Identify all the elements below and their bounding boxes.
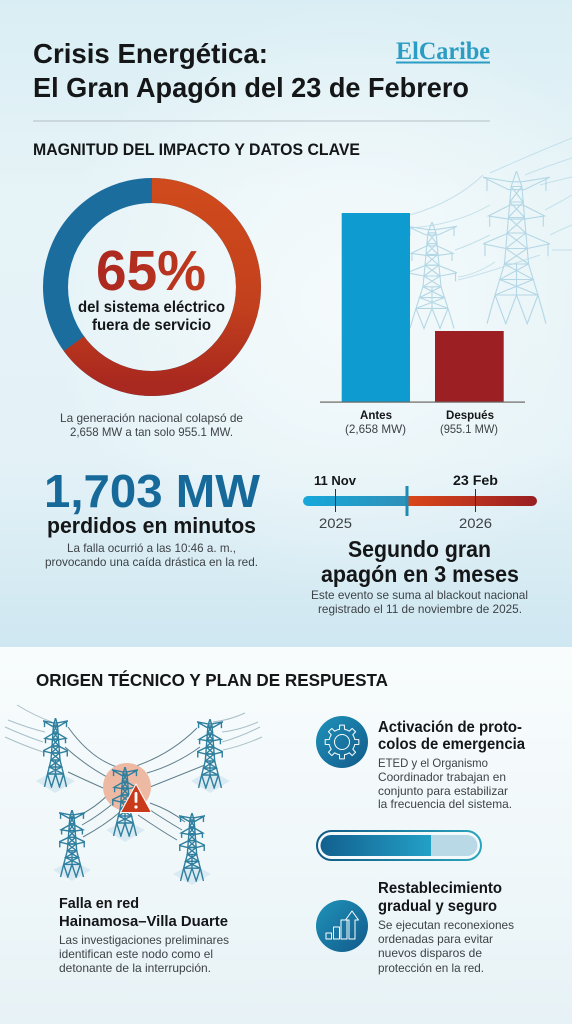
logo: El Caribe: ElCaribe: [396, 38, 490, 65]
text: restablecimiento: Restablecimiento: [378, 880, 502, 897]
text: restablecimiento: nuevos disparos de: [378, 946, 482, 960]
stat: 1,703 MW: La falla ocurrió a las 10:46 a. m.,: [67, 541, 236, 555]
tower: top right: [197, 719, 223, 788]
donut label: fuera de servicio: [92, 317, 211, 334]
bar: antes: [342, 213, 410, 402]
label: antes: (2,658 MW): [345, 422, 406, 436]
text: activación de protocolos: colos de emergencia: [378, 736, 525, 753]
tower: centre: [112, 767, 138, 836]
stat: 1,703 MW: provocando una caída drástica en la red.: [45, 555, 258, 569]
tower: bottom left: [59, 810, 85, 877]
stat: segundo gran apagón: registrado el 11 de noviembre de 2025.: [318, 602, 522, 616]
text: activación de protocolos: conjunto para estabilizar: [378, 784, 508, 798]
tower: top left: [43, 718, 68, 787]
icon: warning triangle: [120, 784, 152, 812]
heading: magnitud del impacto: MAGNITUD DEL IMPACTO Y DATOS CLAVE: [33, 140, 360, 159]
text: falla en red: detonante de la interrupción.: [59, 961, 211, 975]
icon: gear: [316, 716, 368, 768]
label: después: (955.1 MW): [440, 422, 498, 436]
label: antes: Antes: [360, 408, 392, 422]
stat: segundo gran apagón: Este evento se suma al blackout nacional: [311, 588, 528, 602]
donut caption: [60, 411, 243, 439]
tower: bottom right: [179, 813, 205, 881]
donut caption: La generación nacional colapsó de: [60, 411, 243, 425]
background: upper section: [0, 0, 572, 647]
text: activación de protocolos: Coordinador trabajan en: [378, 770, 506, 784]
text: falla en red: Falla en red: [59, 895, 139, 912]
text: activación de protocolos: [378, 719, 525, 811]
stat: 1,703 MW: [44, 465, 261, 569]
progress bar: [317, 831, 481, 860]
text: restablecimiento: ordenadas para evitar: [378, 932, 493, 946]
donut label: del sistema eléctrico: [78, 299, 225, 316]
bar: después: [435, 331, 504, 402]
bar chart: antes y después: [320, 213, 525, 436]
text: activación de protocolos: Activación de proto-: [378, 719, 522, 736]
text: restablecimiento: Se ejecutan reconexiones: [378, 918, 514, 932]
fault highlight: [103, 763, 151, 811]
stat: 1,703 MW: perdidos en minutos: [47, 513, 256, 538]
timeline: [303, 473, 537, 531]
text: restablecimiento: protección en la red.: [378, 961, 484, 975]
stat: segundo gran apagón: Segundo gran: [348, 536, 491, 562]
text: falla en red: identifican este nodo como el: [59, 947, 213, 961]
text: falla en red: [59, 895, 229, 975]
text: activación de protocolos: ETED y el Organismo: [378, 756, 488, 770]
text: restablecimiento: [378, 880, 514, 975]
stat: segundo gran apagón: apagón en 3 meses: [321, 561, 519, 587]
donut value: 65%: [96, 239, 206, 303]
label: después: [440, 408, 498, 436]
title: [33, 38, 469, 103]
date: 11 Nov 2025: 2025: [319, 515, 352, 531]
donut chart: 65%: [56, 190, 248, 384]
heading: origen técnico: ORIGEN TÉCNICO Y PLAN DE RESPUESTA: [36, 669, 388, 690]
text: activación de protocolos: la frecuencia del sistema.: [378, 797, 512, 811]
title: El Gran Apagón del 23 de Febrero: [33, 72, 469, 103]
stat: 1,703 MW: 1,703 MW: [44, 465, 261, 517]
text: falla en red: Hainamosa–Villa Duarte: [59, 913, 228, 930]
stat: segundo gran apagón: [311, 536, 528, 616]
donut label: [78, 299, 225, 334]
text: restablecimiento: gradual y seguro: [378, 898, 497, 915]
label: antes: [345, 408, 406, 436]
icon: growth chart: [316, 900, 368, 952]
donut caption: 2,658 MW a tan solo 955.1 MW.: [70, 425, 233, 439]
network diagram: towers and fault: [5, 705, 262, 885]
date: 23 Feb 2026: 2026: [459, 515, 492, 531]
date: 11 Nov 2025: [314, 473, 357, 531]
background: lower section: [0, 647, 572, 1024]
label: después: Después: [446, 408, 494, 422]
text: falla en red: Las investigaciones preliminares: [59, 933, 229, 947]
title: Crisis Energética:: [33, 38, 268, 69]
date: 23 Feb 2026: 23 Feb: [453, 473, 498, 488]
date: 23 Feb 2026: [453, 473, 498, 531]
pale transmission towers and wires: [407, 138, 572, 328]
date: 11 Nov 2025: 11 Nov: [314, 473, 357, 488]
